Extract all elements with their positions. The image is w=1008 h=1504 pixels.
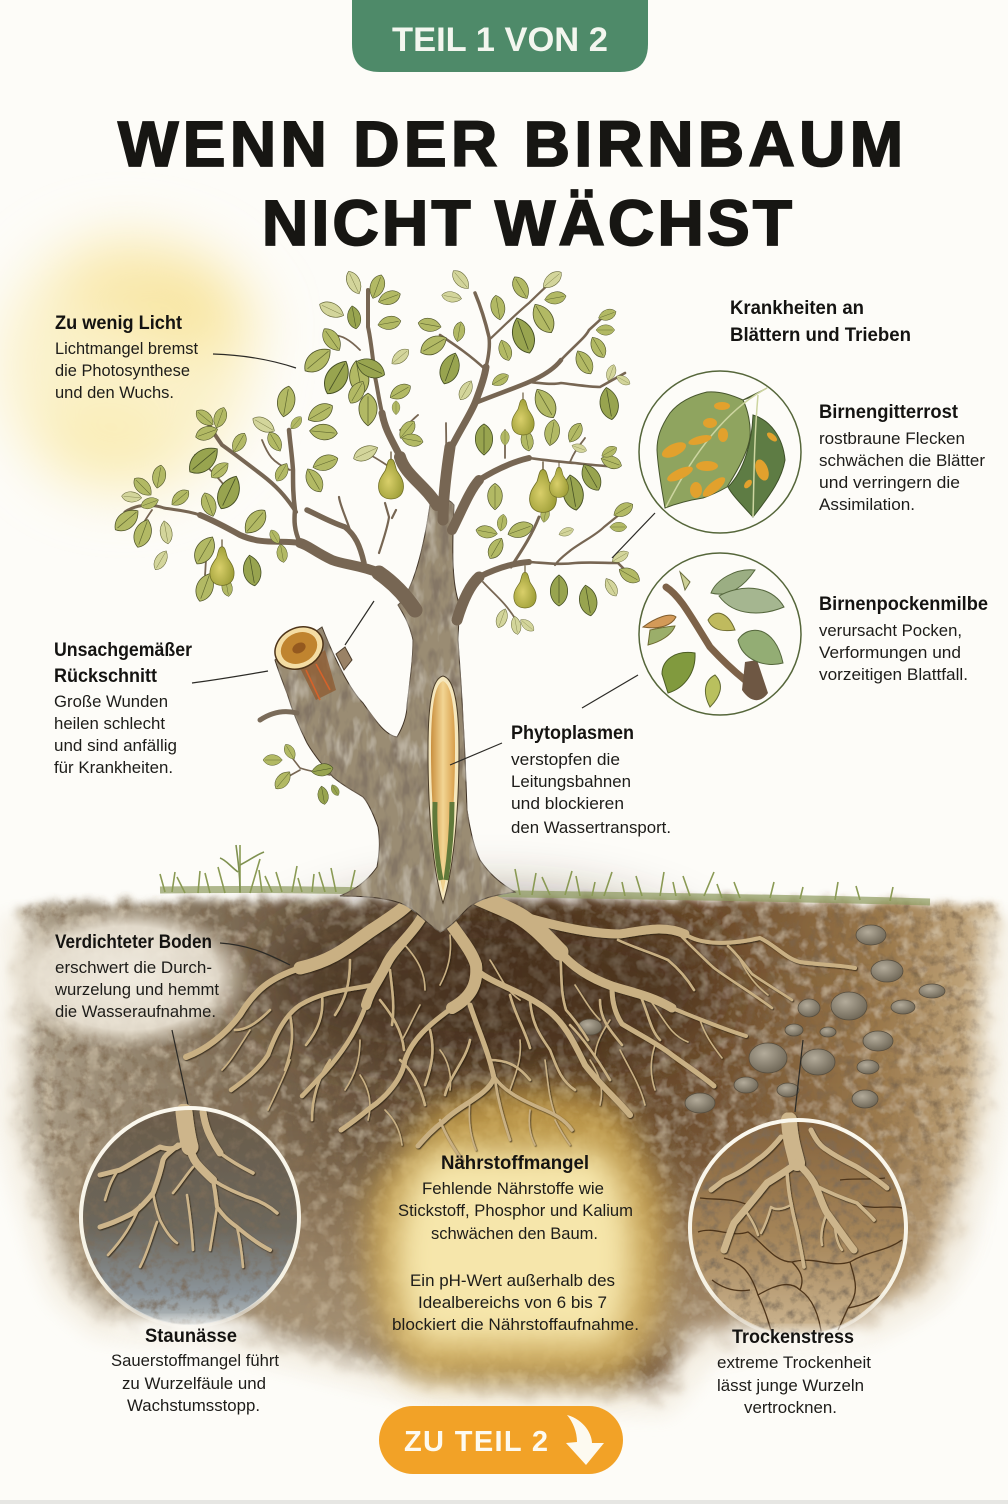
heading: Krankheiten an Blättern und Trieben: Blättern und Trieben (730, 325, 911, 346)
heading: Krankheiten an Blättern und Trieben: Krankheiten an (730, 298, 864, 319)
text: Unsachgemäßer Rückschnitt: Große Wunden (54, 693, 168, 711)
text: Staunässe: Wachstumsstopp. (127, 1397, 260, 1415)
text: Phytoplasmen: verstopfen die (511, 751, 620, 769)
dark topsoil around roots (260, 900, 720, 1070)
title (118, 108, 903, 259)
grass line (160, 845, 930, 902)
text: Zu wenig Licht: Zu wenig Licht (55, 313, 183, 334)
sun glow: zu wenig Licht (0, 235, 265, 495)
text: Staunässe: zu Wurzelfäule und (122, 1375, 266, 1393)
soil cross-section (3, 900, 1000, 1400)
banner: Teil 1 von 2: TEIL 1 VON 2 (392, 21, 608, 59)
text: Trockenstress (717, 1327, 871, 1417)
text: Staunässe (111, 1326, 279, 1415)
text: Verdichteter Boden (54, 932, 219, 1021)
text: Nährstoffmangel: Nährstoffmangel (441, 1153, 589, 1174)
text: Birnengitterrost: und verringern die (819, 474, 960, 492)
panel: Staunässe circle (81, 1108, 299, 1336)
text: Nährstoffmangel: Ein pH-Wert außerhalb des (410, 1272, 615, 1290)
phytoplasma cut (428, 676, 459, 903)
text: Nährstoffmangel: Idealbereichs von 6 bis 7 (418, 1294, 607, 1312)
text: Phytoplasmen: den Wassertransport. (511, 819, 671, 837)
text: Staunässe: Sauerstoffmangel führt (111, 1352, 279, 1370)
text: Zu wenig Licht (55, 313, 198, 402)
text: Zu wenig Licht: und den Wuchs. (55, 384, 174, 402)
rocks (578, 925, 945, 1113)
branches (125, 280, 632, 780)
text: Verdichteter Boden: erschwert die Durch- (55, 959, 212, 977)
text: Birnenpockenmilbe: verursacht Pocken, (819, 622, 962, 640)
text: Trockenstress: lässt junge Wurzeln (717, 1377, 864, 1395)
text: Nährstoffmangel: Stickstoff, Phosphor und Kalium (398, 1202, 633, 1220)
tree trunk (260, 499, 515, 932)
text: Unsachgemäßer Rückschnitt (54, 640, 193, 777)
text: Birnengitterrost: Birnengitterrost (819, 402, 959, 423)
text: Trockenstress: vertrocknen. (744, 1399, 837, 1417)
text: Phytoplasmen: und blockieren (511, 795, 624, 813)
text: Unsachgemäßer Rückschnitt: Rückschnitt (54, 666, 158, 687)
pears (210, 392, 568, 608)
text: Zu wenig Licht: Lichtmangel bremst (55, 340, 198, 358)
text: Birnengitterrost: schwächen die Blätter (819, 452, 986, 470)
text: Unsachgemäßer Rückschnitt: heilen schlecht (54, 715, 165, 733)
label patch: pale soil (3, 906, 253, 1050)
roots (186, 888, 855, 1160)
text: Unsachgemäßer Rückschnitt: für Krankheiten. (54, 759, 173, 777)
stump sprout leaves (263, 755, 282, 765)
heading: Krankheiten an Blättern und Trieben (730, 298, 911, 346)
text: Unsachgemäßer Rückschnitt: Unsachgemäßer (54, 640, 193, 661)
text: Birnenpockenmilbe: Birnenpockenmilbe (819, 594, 988, 615)
panel: Trockenstress circle (690, 1120, 906, 1346)
title: WENN DER BIRNBAUM (118, 108, 903, 180)
text: Birnenpockenmilbe (819, 594, 988, 684)
foliage (110, 267, 643, 805)
text: Phytoplasmen: Leitungsbahnen (511, 773, 631, 791)
text: Verdichteter Boden: die Wasseraufnahme. (55, 1003, 216, 1021)
banner: Teil 1 von 2 (352, 0, 648, 72)
button: Zu Teil 2 (379, 1406, 623, 1474)
text: Birnenpockenmilbe: Verformungen und (819, 644, 961, 662)
small plant on ground (220, 845, 264, 892)
text: Phytoplasmen (511, 723, 671, 837)
exposed orange bark on stump (300, 650, 336, 700)
icon: arrow (566, 1415, 604, 1465)
text: Nährstoffmangel (392, 1153, 639, 1334)
title: NICHT WÄCHST (262, 187, 792, 259)
text: Nährstoffmangel: schwächen den Baum. (431, 1225, 598, 1243)
side stub on stump (260, 712, 297, 720)
soil fading edge (13, 915, 1000, 1400)
leader lines (172, 354, 803, 1112)
text: Verdichteter Boden: Verdichteter Boden (55, 932, 212, 953)
text: Staunässe: Staunässe (145, 1326, 237, 1347)
text: Verdichteter Boden: wurzelung und hemmt (54, 981, 219, 999)
text: Phytoplasmen: Phytoplasmen (511, 723, 634, 744)
text: Trockenstress: Trockenstress (732, 1327, 854, 1348)
text: Zu wenig Licht: die Photosynthese (55, 362, 190, 380)
nutrient glow (368, 1088, 665, 1380)
text: Birnengitterrost (819, 402, 986, 514)
text: Nährstoffmangel: Fehlende Nährstoffe wie (422, 1180, 604, 1198)
panel: leaf rust circle (639, 371, 801, 533)
text: Birnengitterrost: rostbraune Flecken (819, 430, 965, 448)
text: Unsachgemäßer Rückschnitt: und sind anfällig (54, 737, 177, 755)
button: Zu Teil 2: ZU TEIL 2 (404, 1426, 548, 1458)
cut face (268, 619, 330, 677)
text: Birnenpockenmilbe: vorzeitigen Blattfall. (819, 666, 968, 684)
text: Birnengitterrost: Assimilation. (819, 496, 915, 514)
text: Trockenstress: extreme Trockenheit (717, 1354, 871, 1372)
panel: pear blister mite circle (639, 553, 801, 715)
text: Nährstoffmangel: blockiert die Nährstoffaufnahme. (392, 1316, 639, 1334)
